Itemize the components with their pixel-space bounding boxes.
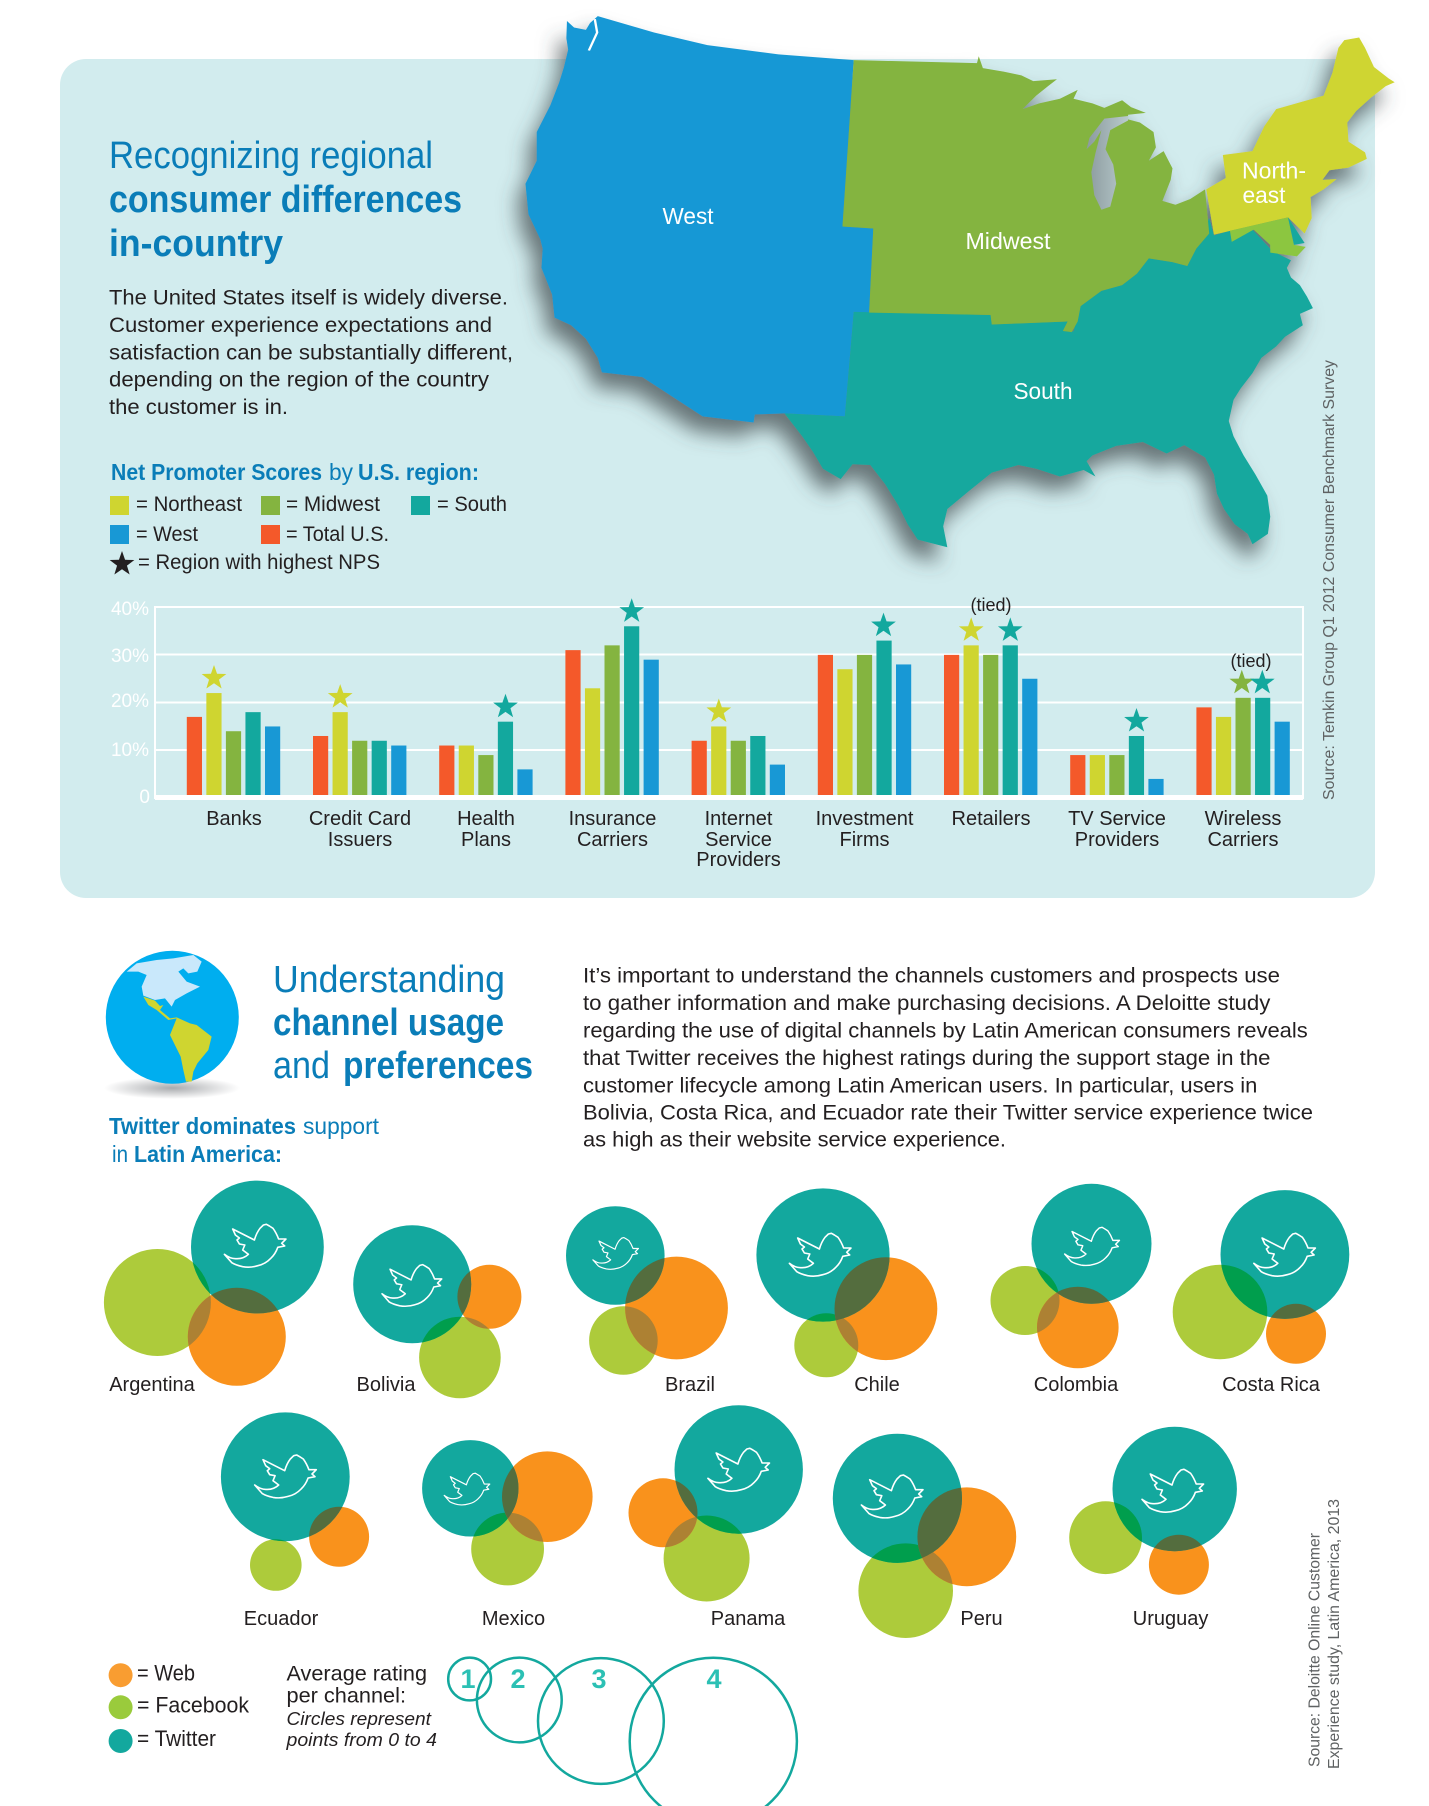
category labels: Banks <box>206 808 262 830</box>
title: recognizing regional consumer differences: Recognizing regional <box>109 135 433 177</box>
legend: regions: = Region with highest NPS <box>138 551 380 574</box>
scale: rating circles 1 to 4: 1 <box>460 1664 476 1694</box>
subheading: Twitter dominates support in Latin America: support <box>303 1113 380 1139</box>
category labels: Issuers <box>328 829 392 851</box>
category labels: Internet <box>705 808 773 830</box>
legend: regions: = Northeast <box>136 493 242 516</box>
category labels: Firms <box>840 829 889 851</box>
axis labels: 20% <box>111 691 149 712</box>
chart: Chile: Chile <box>854 1374 900 1396</box>
category labels: Plans <box>461 829 511 851</box>
axis labels: 0 <box>139 787 150 808</box>
legend: channels: = Facebook <box>137 1693 250 1718</box>
text block: Deloitte study paragraph: Bolivia, Costa Rica, and Ecuador rate their Twitter service experience twice <box>583 1101 1313 1124</box>
chart: Colombia: Colombia <box>1034 1374 1119 1396</box>
chart: Peru <box>833 1434 1016 1638</box>
source note: Deloitte <box>1306 1499 1343 1769</box>
chart: Mexico: Mexico <box>482 1608 545 1630</box>
panel background <box>60 59 1375 898</box>
icon: globe <box>104 951 240 1099</box>
axis labels: 10% <box>111 740 149 761</box>
text block: average rating note: Average rating <box>286 1663 427 1686</box>
category labels: Insurance <box>569 808 656 830</box>
text block: average rating note <box>285 1663 437 1750</box>
legend: regions: = South <box>437 493 507 516</box>
bars: Wireless Carriers <box>1196 698 1290 798</box>
category labels: Retailers <box>952 808 1030 830</box>
bars: Retailers <box>944 645 1037 798</box>
panel: regional consumer differences <box>60 16 1395 898</box>
category labels: TV Service <box>1068 808 1166 830</box>
title: recognizing regional consumer differences: in-country <box>109 223 283 265</box>
category labels: Health <box>457 808 515 830</box>
legend heading: by <box>329 459 353 485</box>
legend: channels: = Twitter <box>137 1726 216 1751</box>
chart: Mexico <box>422 1440 593 1630</box>
heading: understanding channel usage and preferences: channel usage <box>273 1002 504 1044</box>
map: United States regions <box>525 16 1395 547</box>
title: recognizing regional consumer differences: consumer differences <box>109 179 462 221</box>
category labels: Credit Card <box>309 808 411 830</box>
text block: intro: The United States itself is widely diverse. <box>109 286 508 309</box>
chart: Chile <box>756 1188 937 1396</box>
scale: rating circles 1 to 4: 4 <box>706 1664 722 1694</box>
text block: Deloitte study paragraph: as high as their website service experience. <box>583 1129 1006 1152</box>
category labels: Carriers <box>577 829 648 851</box>
category labels: Providers <box>1075 829 1159 851</box>
source note: Deloitte: Source: Deloitte Online Customer <box>1306 1533 1323 1767</box>
bars: Investment Firms <box>818 641 911 798</box>
text block: intro <box>109 286 513 419</box>
text block: intro: depending on the region of the country <box>109 369 490 392</box>
chart: Panama <box>628 1405 803 1630</box>
map feature: Puget Sound <box>589 19 597 51</box>
source note: Temkin Group: Source: Temkin Group Q1 2012 Consumer Benchmark Survey <box>1321 360 1338 800</box>
category labels: Wireless <box>1205 808 1281 830</box>
text block: Deloitte study paragraph: customer lifecycle among Latin American users. In particular, users in <box>583 1074 1257 1097</box>
category labels: Providers <box>696 849 781 871</box>
map label: Northeast <box>1242 158 1306 208</box>
scale: rating circles 1 to 4: 2 <box>510 1664 526 1694</box>
bars: Credit Card Issuers <box>313 712 406 798</box>
bars: Internet Service Providers <box>692 726 785 798</box>
chart: Ecuador <box>221 1412 369 1630</box>
chart: Brazil: Brazil <box>665 1374 715 1396</box>
heading: understanding channel usage and preferences <box>273 959 533 1087</box>
text block: intro: Customer experience expectations and <box>109 314 492 337</box>
text block: Deloitte study paragraph: It’s important to understand the channels customers and prospects use <box>583 965 1280 988</box>
stars: highest NPS region <box>202 598 1275 732</box>
map region: Delaware <box>1288 217 1305 245</box>
map region: Northeast <box>1206 38 1395 235</box>
subheading: Twitter dominates support in Latin America: in <box>112 1141 128 1167</box>
text block: Deloitte study paragraph <box>583 965 1313 1152</box>
axis labels <box>111 599 150 808</box>
chart: Uruguay <box>1069 1427 1237 1630</box>
map label: Midwest: Midwest <box>966 228 1051 254</box>
chart: Peru: Peru <box>960 1608 1003 1630</box>
legend: regions <box>110 493 507 575</box>
chart: Ecuador: Ecuador <box>244 1608 319 1630</box>
map label: South: South <box>1014 378 1072 404</box>
legend: regions: = Total U.S. <box>286 523 389 546</box>
text block: intro: satisfaction can be substantially different, <box>109 341 513 364</box>
text block: Deloitte study paragraph: regarding the use of digital channels by Latin American consumers reveals <box>583 1019 1308 1042</box>
chart: Panama: Panama <box>711 1608 786 1630</box>
subheading: Twitter dominates support in Latin America <box>109 1113 380 1167</box>
source note: Deloitte: Experience study, Latin America, 2013 <box>1326 1499 1343 1769</box>
scale: rating circles 1 to 4 <box>448 1658 797 1806</box>
text block: Deloitte study paragraph: to gather information and make purchasing decisions. A Deloitte study <box>583 992 1271 1015</box>
category labels: Investment <box>816 808 914 830</box>
category labels: Carriers <box>1207 829 1279 851</box>
bars: TV Service Providers <box>1070 736 1164 798</box>
bars: Insurance Carriers <box>565 626 659 798</box>
bars: Banks <box>187 693 280 798</box>
category labels: Service <box>705 829 772 851</box>
map feature: Lake Michigan <box>1087 116 1128 210</box>
note: Wireless tied: (tied) <box>1230 651 1272 671</box>
text block: average rating note: points from 0 to 4 <box>285 1730 437 1750</box>
chart: Costa Rica <box>1173 1190 1349 1396</box>
legend: channels: = Web <box>137 1661 195 1686</box>
text block: average rating note: per channel: <box>286 1685 406 1708</box>
chart: Uruguay: Uruguay <box>1133 1608 1208 1630</box>
map label: Northeast: east <box>1242 182 1286 208</box>
bar chart: Net Promoter Scores by industry and region <box>111 595 1303 871</box>
chart: Brazil <box>566 1206 728 1396</box>
subheading: Twitter dominates support in Latin America: Latin America: <box>134 1141 282 1167</box>
legend heading: Net Promoter Scores <box>111 459 322 485</box>
legend heading <box>111 459 479 485</box>
text block: Deloitte study paragraph: that Twitter receives the highest ratings during the support stage in the <box>583 1047 1270 1070</box>
legend: regions: = West <box>136 523 198 546</box>
map region: South <box>784 218 1313 547</box>
chart: Bolivia: Bolivia <box>357 1374 416 1396</box>
title: recognizing regional consumer differences <box>109 135 462 265</box>
chart: Costa Rica: Costa Rica <box>1222 1374 1321 1396</box>
legend: regions: = Midwest <box>286 493 380 516</box>
axis labels: 30% <box>111 646 149 667</box>
subheading: Twitter dominates support in Latin America: Twitter dominates <box>109 1113 296 1139</box>
category labels <box>206 808 1281 871</box>
chart: Colombia <box>990 1184 1152 1396</box>
legend heading: U.S. region: <box>358 459 479 485</box>
scale: rating circles 1 to 4: 3 <box>591 1664 607 1694</box>
map region: West <box>525 16 873 423</box>
heading: understanding channel usage and preferences: and <box>273 1045 330 1087</box>
map region: Maryland <box>1230 217 1306 256</box>
text block: intro: the customer is in. <box>109 396 288 419</box>
map label: West: West <box>662 203 714 229</box>
heading: understanding channel usage and preferences: Understanding <box>273 959 505 1001</box>
chart: Argentina: Argentina <box>109 1374 196 1396</box>
axis labels: 40% <box>111 599 149 620</box>
chart: Bolivia <box>353 1225 521 1398</box>
map region: Midwest <box>842 56 1209 332</box>
legend: channels <box>109 1661 250 1753</box>
bars: Health Plans <box>439 722 533 798</box>
text block: average rating note: Circles represent <box>286 1709 432 1729</box>
map label: Northeast: North- <box>1242 158 1306 184</box>
chart: Argentina <box>104 1181 324 1396</box>
note: Retailers tied: (tied) <box>970 595 1012 615</box>
heading: understanding channel usage and preferences: preferences <box>343 1045 533 1087</box>
